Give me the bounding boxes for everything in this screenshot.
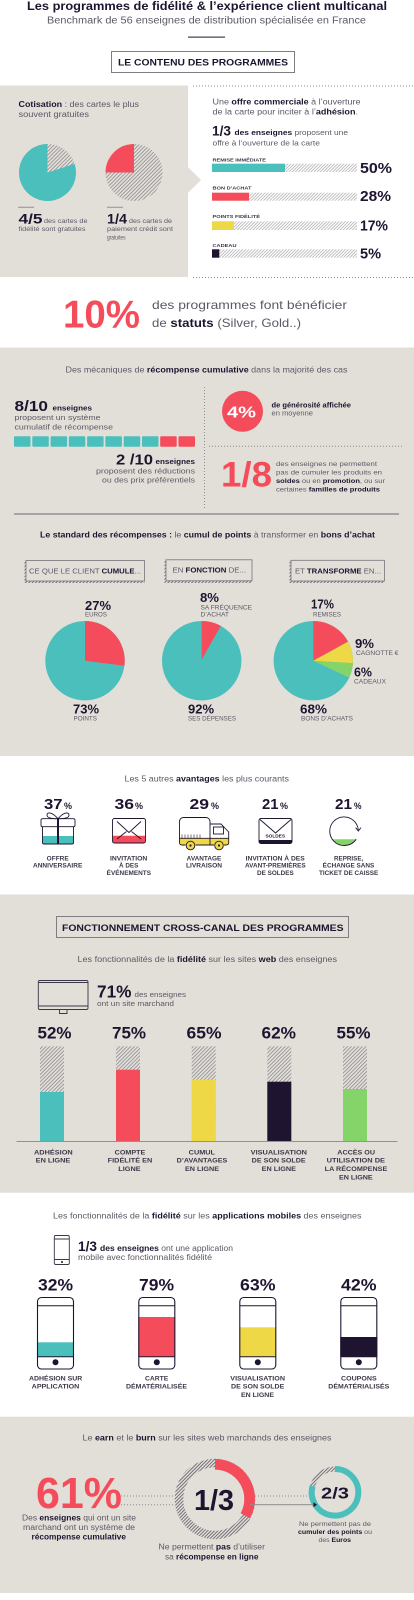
- bar: remise immédiate: REMISE IMMÉDIATE: [212, 156, 267, 164]
- benefit: avant-premières de soldes: DE SOLDES: [257, 870, 294, 877]
- phone chart: carte dématérialisée: 79%: [139, 1276, 174, 1295]
- bar: cadeau: CADEAU: [212, 243, 237, 249]
- web heading: Les fonctionnalités de la fidélité sur les sites web des enseignes: [78, 955, 337, 964]
- pie chart: en fonction de: SES DÉPENSES: [188, 713, 236, 722]
- ring chart: 2/3: [298, 1469, 372, 1544]
- pie chart: en fonction de: [162, 590, 252, 722]
- ring chart: 2/3: cumuler des points ou: [298, 1529, 372, 1536]
- panel: cotisation: souvent gratuites: [18, 110, 89, 119]
- stat 2/10: ou des prix préférentiels: [102, 476, 195, 485]
- phone chart: adhésion sur application: ADHÉSION SUR: [29, 1373, 83, 1382]
- stat 1/8: soldes ou en promotion , ou sur: [276, 478, 386, 485]
- callout: 10% statuts: des programmes font bénéficier: [152, 298, 347, 312]
- stat 8/10: [14, 399, 113, 432]
- icon: soldes envelope: SOLDES: [266, 834, 285, 839]
- bar: bon d'achat: [212, 186, 391, 205]
- benefit: invitation à des événements: %: [135, 801, 143, 811]
- label box: ce que le client cumule: [24, 560, 144, 583]
- bar: accès à la récompense en ligne: [325, 1023, 388, 1181]
- phone chart: adhésion sur application: APPLICATION: [32, 1384, 80, 1391]
- phone chart: carte dématérialisée: [126, 1276, 188, 1391]
- stat 1/4: gratuites: [107, 234, 126, 242]
- bar: cadeau: [212, 243, 381, 263]
- cotisation heading: Cotisation : des cartes le plus: [18, 100, 139, 109]
- stat 71%: des enseignes: [134, 992, 187, 999]
- phone chart: visualisation de son solde: EN LIGNE: [241, 1392, 275, 1399]
- stat 4% générosité: de générosité affichée: [272, 402, 351, 409]
- stat 1/3 application: 1/3: [78, 1238, 97, 1254]
- stat 8/10: enseignes: [52, 404, 92, 413]
- pie chart: en fonction de: 92%: [188, 702, 214, 717]
- bar: visualisation de son solde: EN LIGNE: [262, 1166, 297, 1173]
- bar: cadeau: 5%: [360, 246, 381, 263]
- offre heading: Une offre commerciale à l’ouverture: [212, 98, 361, 106]
- bar: compte fidélité en ligne: FIDÉLITÉ EN: [108, 1156, 153, 1165]
- phone chart: carte dématérialisée: CARTE: [145, 1375, 169, 1382]
- ring chart: 1/3: Ne permettent pas d’utiliser: [158, 1542, 265, 1551]
- stat 1/8: pas de cumuler les produits en: [276, 470, 382, 477]
- benefit: reprise sans ticket: %: [354, 801, 362, 811]
- stat 4/5: [18, 210, 88, 233]
- stat 1/4: [107, 210, 173, 242]
- benefit: offre anniversaire: %: [64, 801, 72, 811]
- benefit: invitation à des événements: À DES: [119, 861, 138, 870]
- pie chart: ce que le client cumule: [45, 598, 125, 722]
- bar: accès à la récompense en ligne: 55%: [336, 1023, 370, 1042]
- stat 61%: marchand ont un système de: [23, 1523, 136, 1532]
- bar: adhésion en ligne: 52%: [38, 1023, 72, 1042]
- stat 8/10: cumulatif de récompense: [14, 423, 113, 432]
- phone chart: coupons dématérialisés: COUPONS: [341, 1375, 377, 1382]
- label box: et transforme en: ET TRANSFORME EN...: [295, 566, 381, 575]
- pie chart: en fonction de: 8%: [200, 590, 219, 605]
- stat 1/3 application: des enseignes ont une application: [100, 1244, 233, 1253]
- stat 4/5: fidélité sont gratuites: [18, 226, 86, 233]
- benefit: avantage livraison: %: [211, 801, 219, 811]
- pie chart: et transforme en: [274, 597, 399, 722]
- bar: visualisation de son solde: VISUALISATION: [251, 1149, 307, 1156]
- benefit: avantage livraison: AVANTAGE: [187, 855, 221, 862]
- phone chart: adhésion sur application: 32%: [38, 1276, 73, 1295]
- section heading: cross-canal: FONCTIONNEMENT CROSS-CANAL DES PROGRAMMES: [62, 923, 344, 934]
- stat 8/10: 8/10: [14, 399, 48, 415]
- benefit: avant-premières de soldes: AVANT-PREMIÈRES: [245, 861, 306, 870]
- stat 1/8: 1/8: [221, 456, 272, 495]
- benefit: reprise sans ticket: 21: [335, 796, 352, 813]
- section heading: le contenu des programmes: LE CONTENU DES PROGRAMMES: [118, 57, 288, 68]
- label box: en fonction de: [164, 560, 252, 583]
- benefit: invitation à des événements: ÉVÉNEMENTS: [107, 868, 151, 877]
- stat 1/3: offre à l’ouverture de la carte: [212, 138, 320, 148]
- panel: offre commerciale: de la carte pour inciter à l’ adhésion .: [212, 108, 358, 117]
- benefit: avant-premières de soldes: [245, 796, 306, 877]
- pie chart: en fonction de: SA FRÉQUENCE: [200, 603, 252, 612]
- label box: en fonction de: EN FONCTION DE...: [172, 566, 246, 575]
- panel: cotisation: [0, 86, 201, 277]
- phone chart: visualisation de son solde: DE SON SOLDE: [231, 1384, 285, 1391]
- panel: fonctionnement cross-canal web: [0, 894, 414, 1193]
- bar: cumul d'avantages en ligne: 65%: [186, 1023, 222, 1042]
- icon: gift: [41, 813, 75, 844]
- phone chart: visualisation de son solde: [230, 1276, 285, 1399]
- stat 61%: 61%: [36, 1469, 122, 1518]
- bar chart: fonctionnalités web: [16, 1023, 398, 1181]
- bar: cumul d'avantages en ligne: EN LIGNE: [185, 1166, 220, 1173]
- icon: monitor: [38, 980, 88, 1014]
- stat 61%: [22, 1469, 137, 1541]
- mobile heading: Les fonctionnalités de la fidélité sur les applications mobiles des enseignes: [53, 1212, 361, 1221]
- benefit: offre anniversaire: ANNIVERSAIRE: [33, 863, 82, 870]
- bar: cumul d'avantages en ligne: CUMUL: [189, 1149, 215, 1156]
- stat 2/10: [96, 452, 195, 485]
- panel: mécaniques et standard des récompenses: [0, 348, 414, 756]
- stat 1/3: 1/3: [212, 122, 231, 138]
- bar: visualisation de son solde: 62%: [262, 1023, 296, 1042]
- stat 1/4: 1/4: [107, 210, 127, 226]
- bar: adhésion en ligne: [34, 1023, 73, 1165]
- title: Les programmes de fidélité & l’expérience client multicanal: [27, 1, 387, 13]
- benefit: reprise sans ticket: [319, 796, 378, 877]
- stat 1/3: [212, 122, 348, 148]
- bar: adhésion en ligne: ADHÉSION: [34, 1147, 73, 1156]
- phone chart: visualisation de son solde: VISUALISATION: [230, 1375, 285, 1382]
- stat 4% générosité: [222, 391, 351, 432]
- panel: earn et burn: [0, 1417, 414, 1593]
- arrow: 1/3 vers 2/3: [250, 1502, 317, 1507]
- stat 2/10: proposent des réductions: [96, 467, 195, 476]
- callout: 10% statuts: de statuts (Silver, Gold..): [152, 316, 301, 330]
- stat 1/8: des enseignes ne permettent: [276, 461, 377, 468]
- pie chart: et transforme en: 17%: [311, 597, 334, 612]
- earn and burn heading: Le earn et le burn sur les sites web marchands des enseignes: [82, 1433, 332, 1443]
- benefit: invitation à des événements: INVITATION: [110, 855, 148, 862]
- ring chart: 2/3: 2/3: [321, 1486, 349, 1503]
- bar: compte fidélité en ligne: 75%: [112, 1023, 146, 1042]
- stat 71%: [97, 981, 187, 1008]
- stat 4% générosité: 4%: [227, 405, 256, 422]
- panel: offre commerciale: [212, 98, 392, 263]
- bar: compte fidélité en ligne: [108, 1023, 153, 1173]
- icon: return arrow: [330, 817, 361, 846]
- phone chart: coupons dématérialisés: 42%: [341, 1276, 376, 1295]
- bar: bon d'achat: 28%: [360, 188, 391, 205]
- bar: accès à la récompense en ligne: UTILISATION DE: [327, 1158, 386, 1165]
- pie: 4/5 cartes fidélité gratuites: [19, 144, 76, 201]
- stat 1/3 application: mobile avec fonctionnalités fidélité: [78, 1253, 212, 1262]
- subtitle: Benchmark de 56 enseignes de distribution spécialisée en France: [47, 16, 366, 26]
- bar: visualisation de son solde: DE SON SOLDE: [252, 1158, 306, 1165]
- benefit: avant-premières de soldes: 21: [262, 796, 278, 813]
- callout: 10% statuts: [63, 293, 347, 336]
- benefit: invitation à des événements: [107, 796, 151, 877]
- bar: cumul d'avantages en ligne: D’AVANTAGES: [177, 1158, 228, 1165]
- phone chart: visualisation de son solde: 63%: [240, 1276, 276, 1295]
- heading: autres avantages: Les 5 autres avantages les plus courants: [124, 775, 289, 784]
- stat 2/10: enseignes: [156, 457, 195, 466]
- bar: accès à la récompense en ligne: ACCÈS OU: [337, 1147, 375, 1156]
- stat 1/3: des enseignes proposent une: [234, 128, 348, 137]
- bar: points fidélité: 17%: [360, 218, 388, 235]
- bar: visualisation de son solde: [251, 1023, 307, 1173]
- phone chart: carte dématérialisée: DÉMATÉRIALISÉE: [126, 1382, 188, 1391]
- standard heading: Le standard des récompenses : le cumul de points à transformer en bons d’achat: [40, 529, 375, 539]
- phone chart: adhésion sur application: [29, 1276, 83, 1391]
- pie chart: et transforme en: REMISES: [313, 612, 341, 619]
- benefit: reprise sans ticket: TICKET DE CAISSE: [319, 870, 378, 877]
- bar: compte fidélité en ligne: COMPTE: [115, 1149, 146, 1156]
- ring chart: 1/3: [158, 1463, 265, 1561]
- benefit: invitation à des événements: 36: [114, 796, 134, 813]
- stat 71%: 71%: [97, 981, 132, 1001]
- bar: adhésion en ligne: EN LIGNE: [36, 1158, 71, 1165]
- pie chart: et transforme en: BONS D’ACHATS: [301, 715, 353, 722]
- pie chart: et transforme en: CAGNOTTE €: [356, 650, 399, 657]
- segmented bar 8 sur 10: [14, 436, 195, 447]
- ring chart: 2/3: Ne permettent pas de: [299, 1521, 371, 1528]
- label box: ce que le client cumule: CE QUE LE CLIENT CUMULE...: [29, 566, 141, 575]
- bar: points fidélité: POINTS FIDÉLITÉ: [212, 212, 261, 220]
- benefit: reprise sans ticket: ÉCHANGE SANS: [323, 861, 374, 870]
- stat 4/5: 4/5: [18, 210, 43, 226]
- bar: accès à la récompense en ligne: EN LIGNE: [339, 1174, 373, 1181]
- icon: truck: [180, 818, 229, 850]
- benefit: avantage livraison: [180, 796, 229, 870]
- icon: phone: [54, 1236, 69, 1264]
- bar: bon d'achat: BON D’ACHAT: [212, 186, 252, 192]
- stat 61%: Des enseignes qui ont un site: [22, 1514, 137, 1523]
- stat 1/8: certaines familles de produits: [276, 486, 380, 493]
- benefit: avant-premières de soldes: %: [280, 801, 288, 811]
- callout: 10% statuts: 10%: [63, 293, 140, 336]
- bar: compte fidélité en ligne: LIGNE: [118, 1166, 141, 1173]
- stat 1/3 application: [78, 1238, 233, 1262]
- pie: 1/4 cartes paiement crédit gratuites: [106, 144, 162, 201]
- pie chart: ce que le client cumule: EUROS: [85, 612, 107, 619]
- mécaniques heading: Des mécaniques de récompense cumulative dans la majorité des cas: [66, 364, 347, 374]
- stat 1/4: des cartes de: [129, 218, 173, 225]
- pie chart: en fonction de: D’ACHAT: [200, 611, 229, 618]
- stat 61%: récompense cumulative: [32, 1532, 127, 1541]
- pie chart: ce que le client cumule: 73%: [73, 702, 99, 717]
- stat 4% générosité: en moyenne: [272, 411, 313, 418]
- benefit: avant-premières de soldes: INVITATION À DES: [246, 853, 305, 862]
- benefit: offre anniversaire: [33, 796, 82, 870]
- bar: accès à la récompense en ligne: LA RÉCOMPENSE: [325, 1164, 388, 1173]
- benefit: offre anniversaire: OFFRE: [47, 855, 69, 862]
- stat 1/8: [221, 456, 386, 495]
- phone chart: coupons dématérialisés: DÉMATÉRIALISÉS: [328, 1382, 390, 1391]
- pie chart: et transforme en: 9%: [355, 636, 374, 651]
- ring chart: 1/3: 1/3: [194, 1485, 234, 1517]
- stat 2/10: 2 /10: [116, 452, 153, 468]
- pie chart: ce que le client cumule: 27%: [85, 598, 111, 613]
- section heading: le contenu des programmes: [112, 52, 294, 72]
- phone chart: coupons dématérialisés: [328, 1276, 390, 1391]
- section heading: cross-canal: [56, 916, 348, 938]
- bar: cumul d'avantages en ligne: [177, 1023, 228, 1173]
- pie chart: et transforme en: CADEAUX: [354, 679, 387, 686]
- pie chart: et transforme en: 68%: [300, 702, 327, 717]
- bar: points fidélité: [212, 212, 388, 235]
- icon: envelope: [112, 818, 146, 843]
- bar: remise immédiate: [212, 156, 392, 177]
- benefit: avantage livraison: LIVRAISON: [186, 863, 222, 870]
- ring chart: 1/3: sa récompense en ligne: [165, 1552, 259, 1561]
- bar: remise immédiate: 50%: [360, 160, 392, 177]
- benefit: reprise sans ticket: REPRISE,: [334, 855, 364, 862]
- stat 8/10: proposent un système: [14, 413, 100, 422]
- benefit: offre anniversaire: 37: [44, 796, 62, 813]
- stat 71%: ont un site marchand: [97, 1001, 174, 1008]
- pie chart: ce que le client cumule: POINTS: [74, 715, 97, 722]
- pie chart: et transforme en: 6%: [354, 665, 372, 680]
- label box: et transforme en: [290, 560, 384, 583]
- ring chart: 2/3: des Euros: [318, 1537, 351, 1544]
- benefit: avantage livraison: 29: [190, 796, 209, 813]
- stat 1/4: paiement crédit sont: [107, 226, 173, 233]
- stat 4/5: des cartes de: [44, 218, 88, 225]
